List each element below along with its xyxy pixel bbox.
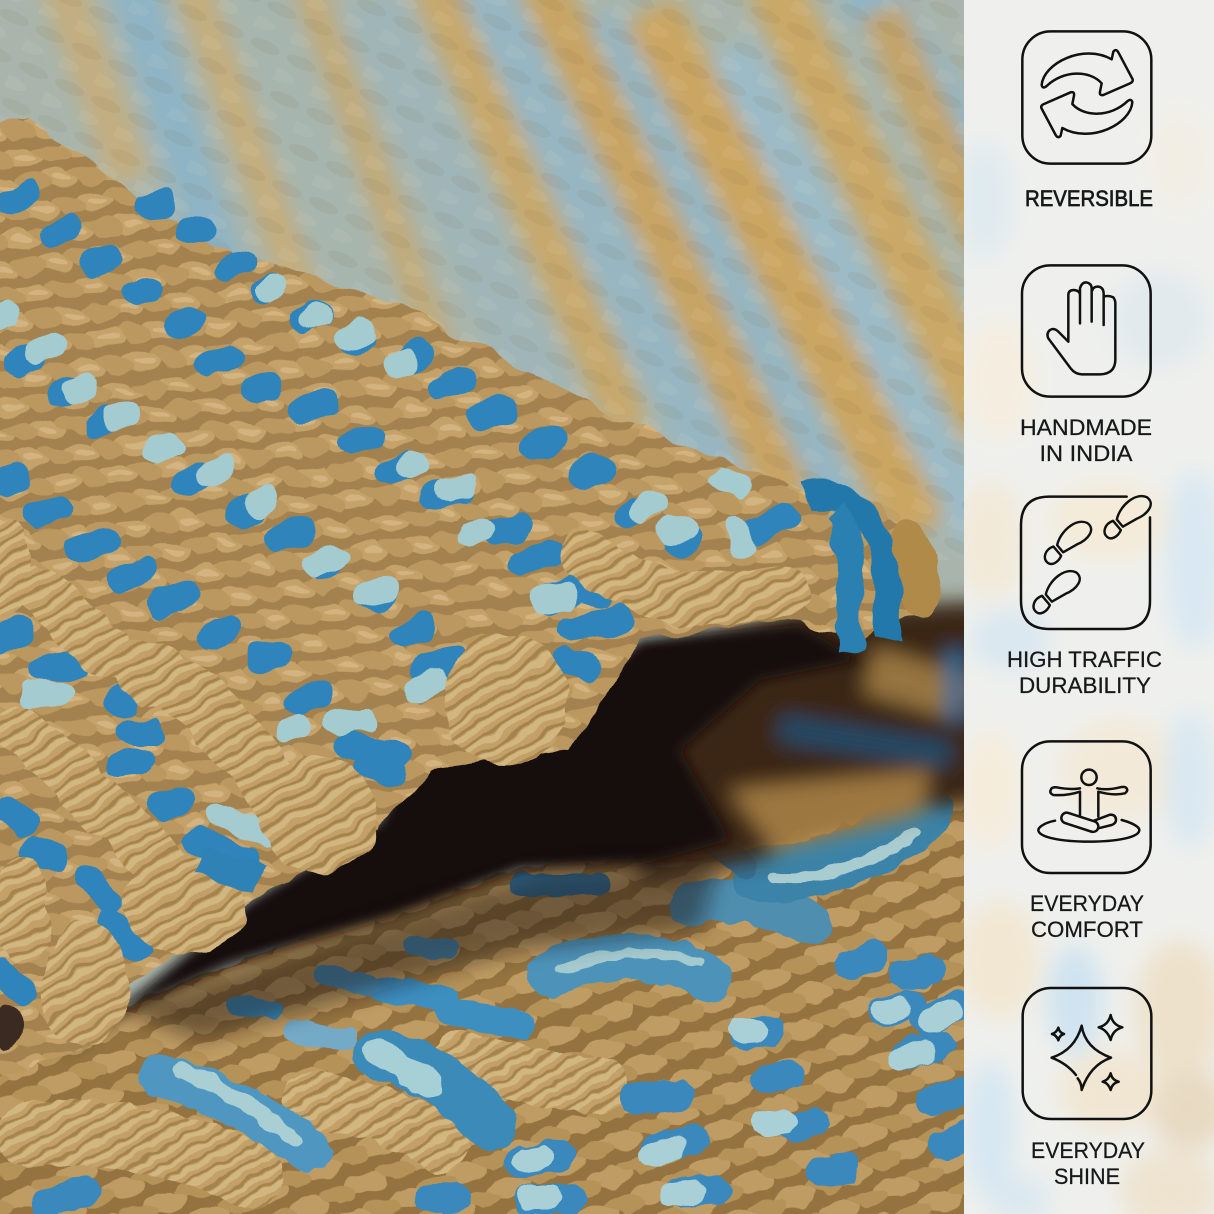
label: handmade in India: HANDMADE xyxy=(1020,415,1152,440)
inner fold of the rug xyxy=(620,600,1000,880)
lower rug layer xyxy=(0,791,964,1214)
feature: high traffic durability xyxy=(1007,490,1162,698)
label: everyday shine: SHINE xyxy=(1054,1164,1120,1189)
icon: hand xyxy=(1022,265,1151,397)
label: handmade in India: IN INDIA xyxy=(1040,441,1133,466)
label: everyday comfort: COMFORT xyxy=(1031,917,1143,942)
label: everyday shine xyxy=(1031,1138,1145,1189)
translucent sidebar panel xyxy=(955,0,1214,1214)
jute rope knots along flap edge xyxy=(0,494,951,1047)
icon: sparkles xyxy=(1023,988,1151,1119)
feature: handmade in India xyxy=(1020,265,1152,466)
lower rug twisted ropes and blue bands xyxy=(30,810,965,1205)
icon: footprints xyxy=(1021,490,1155,629)
feature: reversible xyxy=(1022,31,1153,211)
label: everyday comfort xyxy=(1030,891,1144,942)
label: everyday shine: EVERYDAY xyxy=(1031,1138,1145,1163)
shadow falling on lower rug xyxy=(120,860,720,1040)
top flap of the rug xyxy=(0,118,951,1085)
dark shadow cavity under the flap xyxy=(60,625,860,1060)
label: everyday comfort: EVERYDAY xyxy=(1030,891,1144,916)
icon: reversible arrows xyxy=(1022,31,1151,164)
label: high traffic durability xyxy=(1007,647,1162,698)
label: high traffic durability: HIGH TRAFFIC xyxy=(1007,647,1162,672)
rug background diagonal stripes xyxy=(0,0,964,1006)
feature: everyday comfort xyxy=(1022,741,1151,942)
label: handmade in India xyxy=(1020,415,1152,466)
icon: seated meditation figure xyxy=(1022,741,1151,873)
label: reversible: REVERSIBLE xyxy=(1025,186,1153,211)
label: high traffic durability: DURABILITY xyxy=(1019,673,1151,698)
blue woven stitches xyxy=(0,195,784,991)
feature: everyday shine xyxy=(1023,988,1151,1189)
pale blue woven stitches xyxy=(0,287,744,835)
